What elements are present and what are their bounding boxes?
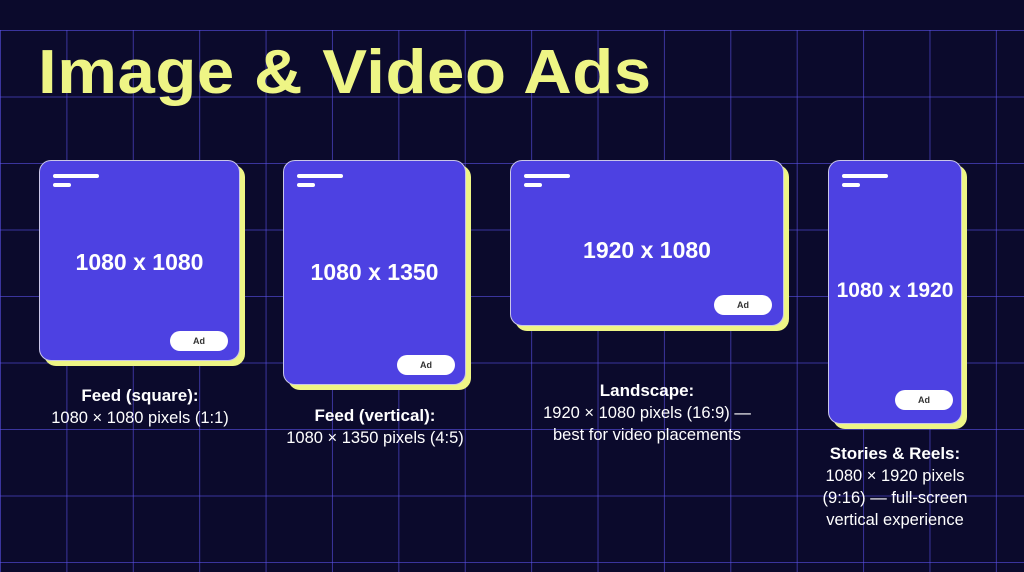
caption: landscape: [543, 381, 751, 444]
caption: stories: Stories & Reels:: [830, 444, 960, 463]
caption: stories: 1080 × 1920 pixels: [826, 467, 964, 485]
card: feed square: [39, 160, 240, 361]
caption: feed vertical: Feed (vertical):: [315, 406, 435, 425]
card: landscape: Ad: [737, 300, 749, 310]
card: feed vertical: [283, 160, 466, 385]
card: stories: [828, 160, 962, 424]
caption: landscape: best for video placements: [553, 426, 741, 444]
card: feed square: 1080 x 1080: [76, 249, 203, 275]
title: Image & Video Ads: [38, 38, 652, 107]
card: stories: 1080 x 1920: [837, 279, 953, 302]
caption: landscape: 1920 × 1080 pixels (16:9) —: [543, 404, 751, 422]
caption: feed square: Feed (square):: [81, 386, 199, 405]
caption: stories: [823, 444, 967, 529]
caption: landscape: Landscape:: [600, 381, 694, 400]
caption: feed vertical: 1080 × 1350 pixels (4:5): [286, 429, 464, 447]
card: feed vertical: Ad: [420, 360, 432, 370]
caption: stories: vertical experience: [826, 511, 964, 529]
card: feed square: Ad: [193, 336, 205, 346]
caption: feed square: 1080 × 1080 pixels (1:1): [51, 409, 229, 427]
caption: stories: (9:16) — full-screen: [823, 489, 967, 507]
card: landscape: 1920 x 1080: [583, 237, 711, 263]
caption: feed vertical: [286, 406, 464, 447]
card: landscape: [510, 160, 784, 326]
card: stories: Ad: [918, 395, 930, 405]
caption: feed square: [51, 386, 229, 427]
card: feed vertical: 1080 x 1350: [311, 259, 438, 285]
